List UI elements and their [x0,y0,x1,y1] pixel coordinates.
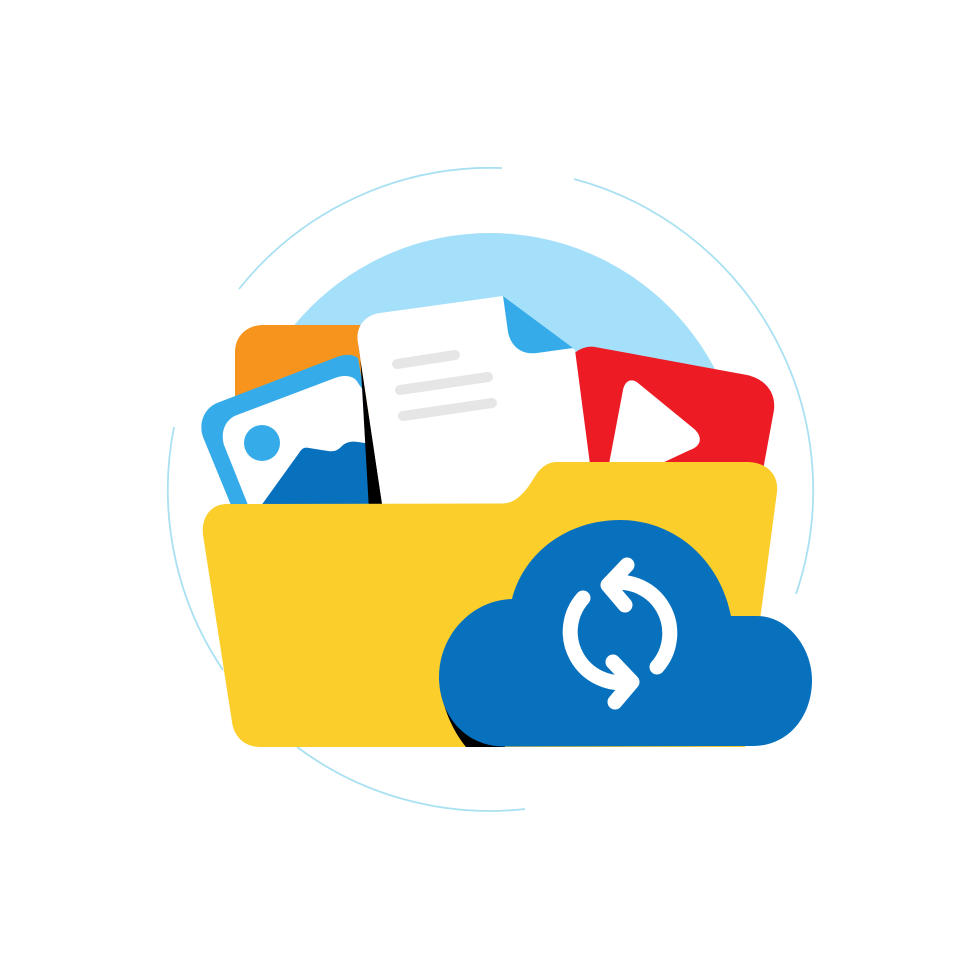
play icon [609,380,700,464]
orbit rings [168,168,813,811]
document shadow [358,343,383,510]
cloud [439,520,812,746]
folder [203,462,777,747]
page fold [503,296,573,353]
sync arrows icon [570,565,670,702]
sun [244,425,280,461]
cloud shadow [439,677,505,747]
document [357,296,596,510]
photo card [201,355,385,510]
orange card [235,325,380,420]
mountains [258,442,378,510]
background circle [236,233,744,487]
text lines [397,355,492,416]
video card [570,347,774,470]
